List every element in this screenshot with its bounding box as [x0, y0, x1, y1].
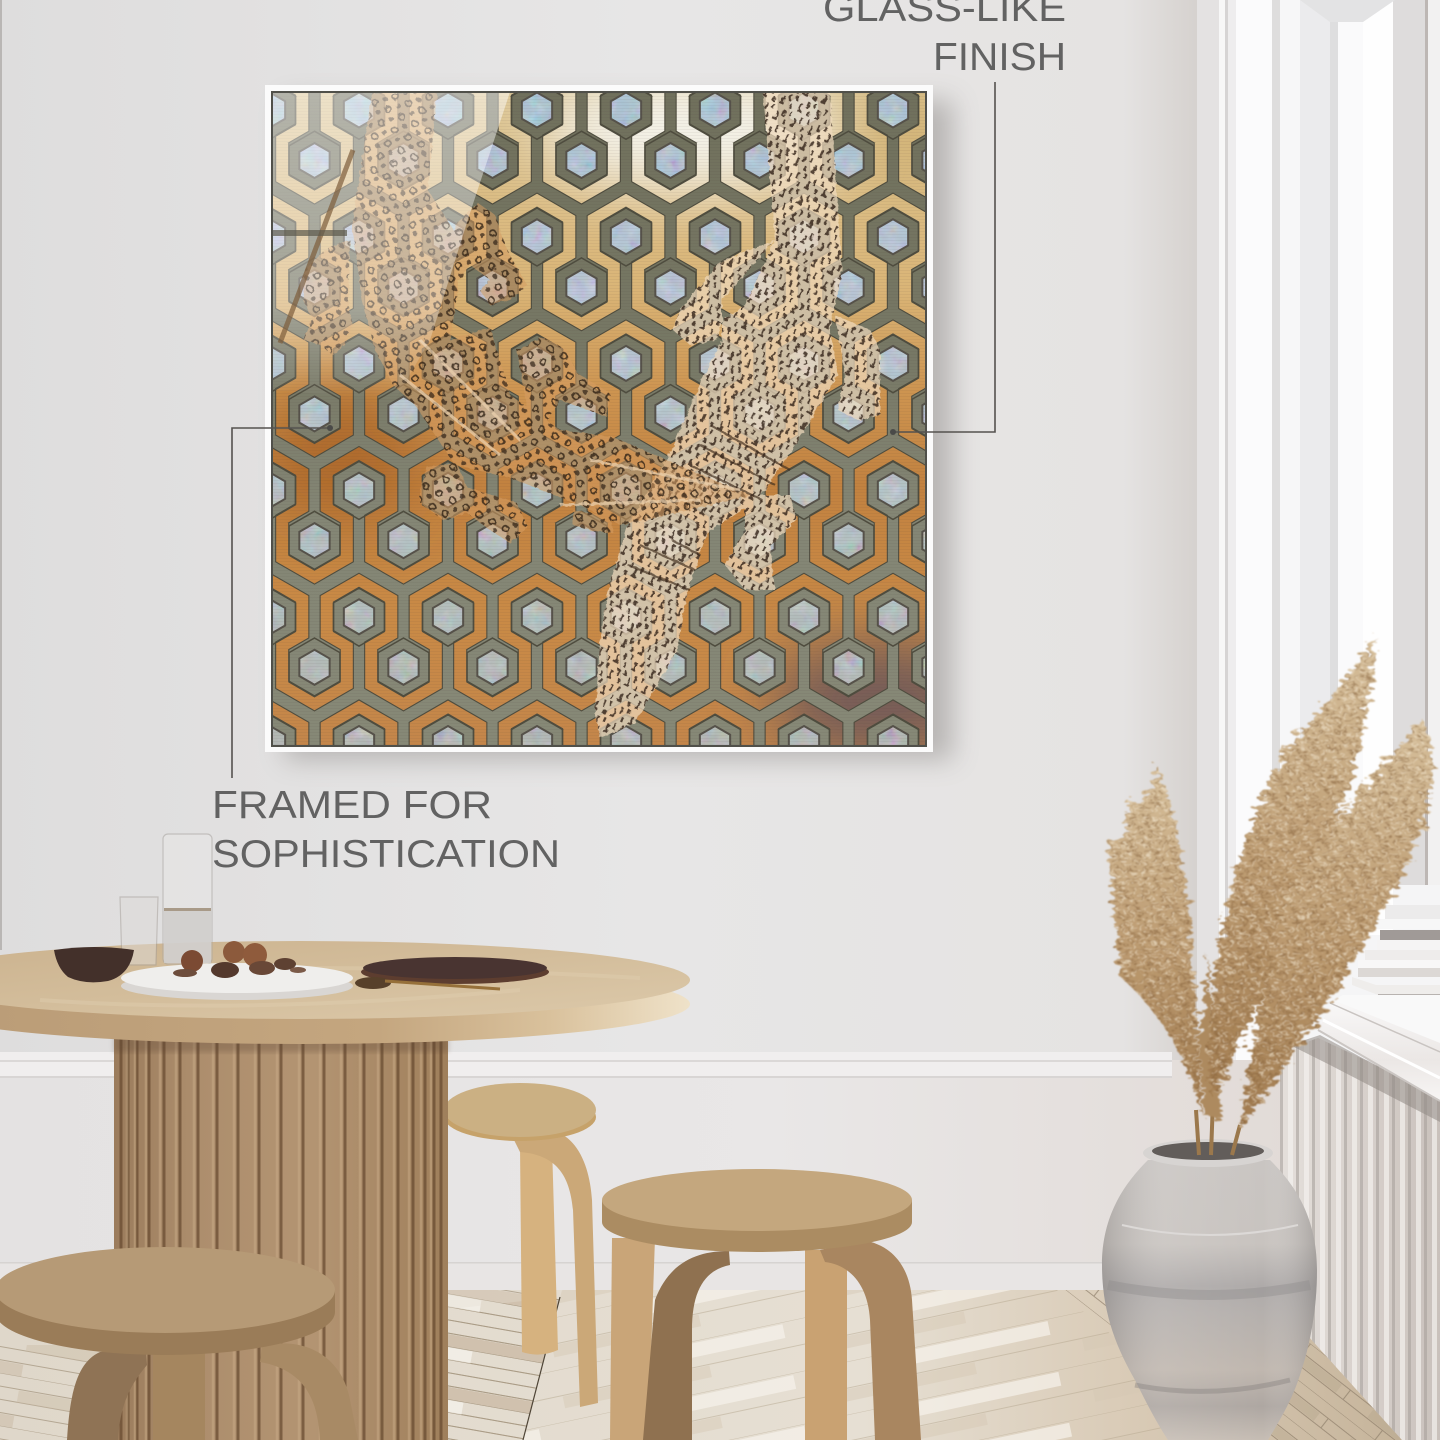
leader dot: [327, 425, 333, 431]
drinking glass: [120, 897, 158, 965]
plume stems: [1196, 1100, 1240, 1155]
crocodile one: [303, 93, 750, 543]
wooden spoon: [355, 977, 500, 989]
baseboard: [0, 1262, 1110, 1292]
background wall: [0, 0, 1440, 1060]
marble board: [121, 963, 353, 1000]
leader dot: [890, 429, 896, 435]
right stool: [602, 1169, 921, 1440]
label: FINISH: [933, 36, 1066, 79]
carafe with water: [163, 834, 212, 964]
callout: framed for sophistication: [212, 425, 560, 876]
brushed metal texture: [272, 92, 926, 746]
floor: [0, 1290, 1440, 1440]
artwork edge: [272, 92, 926, 746]
sill top: [1333, 995, 1440, 1043]
radiator: [1280, 1035, 1440, 1440]
artwork panel: [273, 93, 925, 745]
left edge door frame: [0, 0, 2, 950]
nuts on the board: [173, 941, 306, 978]
dark wooden plate: [361, 957, 549, 984]
crocodile two: [595, 92, 880, 738]
gray lattice background: [272, 92, 926, 746]
dining table top: [0, 941, 690, 1044]
pampas grass: [1107, 636, 1433, 1155]
leader line: [232, 428, 330, 778]
ribbon outlines: [273, 93, 925, 745]
small middle plume: [1198, 955, 1222, 1120]
label: FRAMED FOR: [212, 784, 492, 827]
ceramic vase: [1102, 1139, 1317, 1440]
pearl hexagons: [272, 92, 926, 746]
pearl outlines: [273, 93, 925, 745]
callout: glass-like finish: [823, 0, 1066, 435]
stacked books on sill: [1352, 930, 1440, 996]
chair rail moulding: [0, 1052, 1172, 1078]
window trim: [1197, 0, 1280, 1060]
window reveal: [1280, 0, 1440, 1060]
lower wall: [0, 1060, 1290, 1300]
white frame: [265, 85, 933, 752]
back stool: [444, 1083, 598, 1407]
window: [1197, 0, 1440, 1060]
left stool: [0, 1247, 358, 1440]
leader line: [893, 82, 995, 432]
copper ribbons: [273, 93, 925, 745]
table pedestal fluted base: [114, 1030, 448, 1440]
window sill front: [1318, 1000, 1440, 1101]
dark wooden bowl: [54, 947, 134, 982]
frame drop shadow: [285, 100, 953, 760]
glass reflection: [272, 92, 510, 400]
left plume: [1107, 766, 1202, 1115]
label: SOPHISTICATION: [212, 833, 560, 876]
hexagon rings: [273, 93, 925, 745]
right plume: [1240, 719, 1433, 1130]
tall middle plume: [1209, 636, 1377, 1100]
